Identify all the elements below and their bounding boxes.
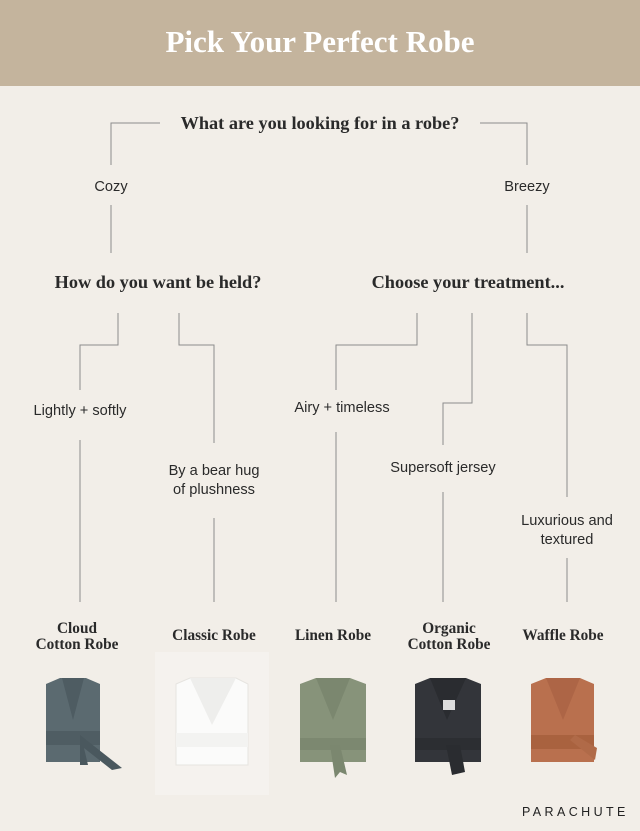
question: main: What are you looking for in a robe? [181, 113, 459, 133]
option: lightly: Lightly + softly [34, 403, 126, 419]
option: luxurious: textured [541, 532, 593, 548]
name: cloud [36, 620, 118, 652]
name: waffle: Waffle Robe [522, 627, 604, 644]
option: bear hug: of plushness [173, 482, 255, 498]
robe: linen [300, 678, 366, 778]
name: classic: Classic Robe [172, 627, 256, 644]
name: organic [408, 620, 490, 652]
option: breezy: Breezy [504, 179, 550, 195]
option: cozy: Cozy [94, 179, 128, 195]
question: treatment: Choose your treatment... [372, 272, 564, 292]
option: luxurious: Luxurious and [521, 513, 613, 529]
option: jersey: Supersoft jersey [390, 460, 496, 476]
header [0, 0, 640, 86]
name: organic: Cotton Robe [408, 636, 490, 652]
option: bear hug: By a bear hug [169, 463, 259, 479]
option: bear hug [169, 463, 259, 498]
robe: organic [415, 678, 481, 775]
robe: classic [176, 678, 248, 765]
logo: PARACHUTE [522, 805, 629, 819]
header: Pick Your Perfect Robe [165, 24, 475, 59]
name: linen: Linen Robe [295, 627, 371, 644]
name: cloud: Cotton Robe [36, 636, 118, 652]
robe: cloud [46, 678, 122, 770]
name: cloud: Cloud [57, 620, 97, 637]
option: airy: Airy + timeless [294, 400, 390, 416]
question: held: How do you want be held? [55, 272, 261, 292]
option: luxurious [521, 513, 613, 548]
name: organic: Organic [422, 620, 476, 637]
robe: waffle [531, 678, 597, 762]
